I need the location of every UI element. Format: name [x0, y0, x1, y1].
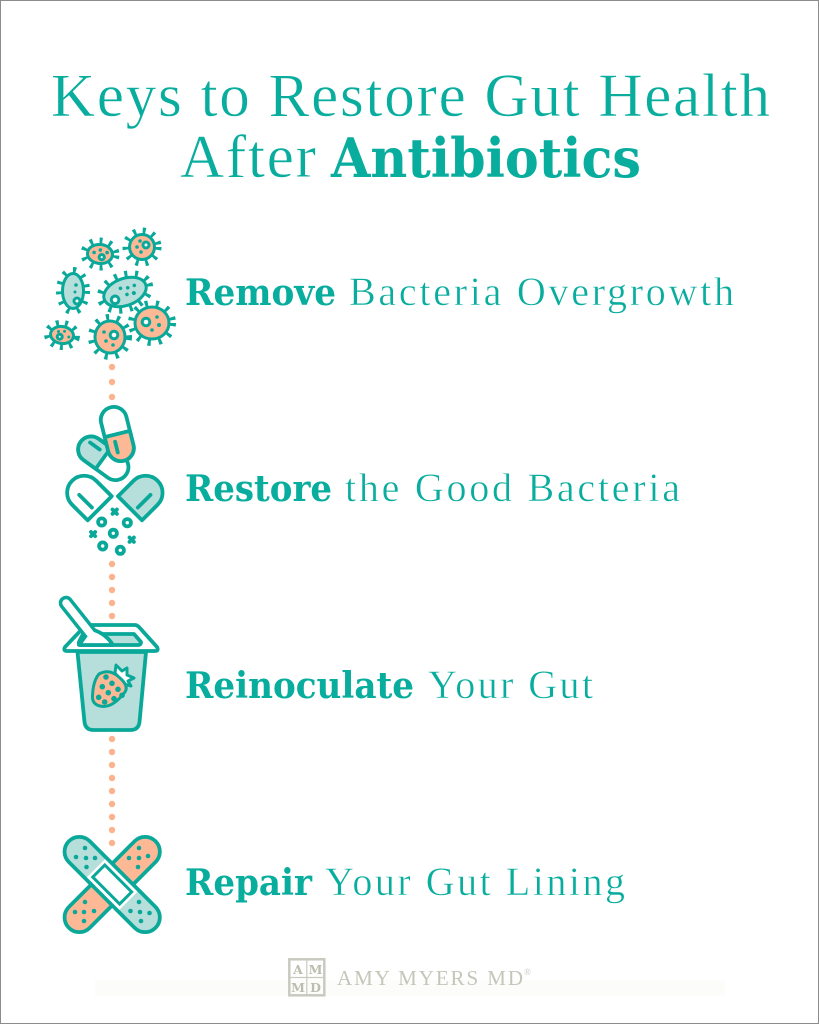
title: Antibiotics [330, 126, 641, 190]
step 1 label: Bacteria Overgrowth [349, 269, 734, 314]
step 2 label [185, 465, 680, 510]
dotted connector [109, 364, 115, 846]
icon: strawberry [92, 665, 134, 706]
step 2 label: Restore [185, 468, 332, 510]
logo: A [292, 962, 303, 977]
icon: yogurt cup [64, 603, 158, 730]
title: After [180, 124, 316, 191]
logo: D [310, 980, 321, 995]
step 4 label: Repair [185, 862, 313, 904]
step 3 label: Reinoculate [185, 665, 414, 707]
step 1 label: Remove [185, 272, 336, 314]
step 4 label [185, 859, 625, 904]
logo: M [309, 962, 323, 977]
icon: capsules [60, 404, 170, 554]
step 4 label: Your Gut Lining [325, 859, 625, 904]
logo: ® [524, 967, 531, 977]
logo: AMY MYERS MD [337, 966, 523, 990]
step 2 label: the Good Bacteria [345, 465, 680, 510]
title [51, 63, 770, 191]
step 3 label [185, 662, 593, 707]
icon: crossed bandages [58, 831, 166, 938]
title: Keys to Restore Gut Health [51, 63, 770, 130]
logo: M [291, 980, 305, 995]
step 3 label: Your Gut [428, 662, 593, 707]
logo [289, 959, 531, 995]
icon: bacteria cluster [47, 232, 172, 356]
